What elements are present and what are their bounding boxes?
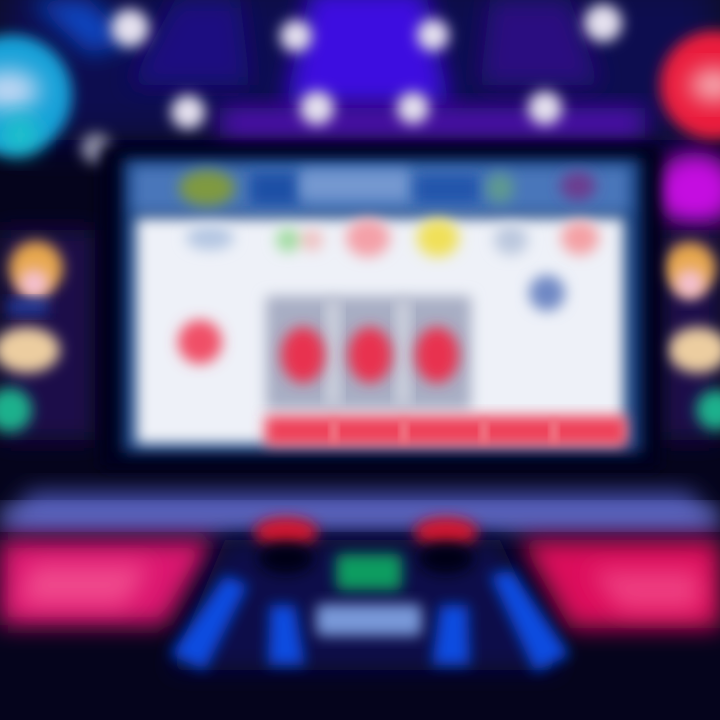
blue symbol <box>529 275 565 311</box>
blue light strips <box>170 570 570 672</box>
red payout bar <box>265 416 627 446</box>
right side panel icons <box>660 230 720 440</box>
green button <box>336 554 402 590</box>
console top band <box>0 492 720 530</box>
left cyan orb <box>0 35 72 155</box>
left red button <box>254 517 318 574</box>
screen white body <box>136 218 624 444</box>
backdrop: upper stage lights <box>0 0 720 140</box>
white stage lights <box>81 4 622 163</box>
reel symbol 3 <box>415 327 459 383</box>
left red symbol <box>178 320 222 364</box>
right red button <box>414 517 478 574</box>
console centre <box>170 540 560 670</box>
right pink keypad <box>520 540 720 628</box>
reels panel <box>266 296 471 410</box>
screen frame <box>100 145 660 470</box>
left side panel icons <box>0 230 95 440</box>
left pink keypad <box>0 540 215 625</box>
reel symbol 2 <box>348 327 392 383</box>
top row icons <box>186 219 599 257</box>
pale blue button <box>316 604 422 636</box>
screen header bar <box>132 166 630 212</box>
reel symbol 1 <box>281 327 325 383</box>
right red orb <box>653 31 720 228</box>
